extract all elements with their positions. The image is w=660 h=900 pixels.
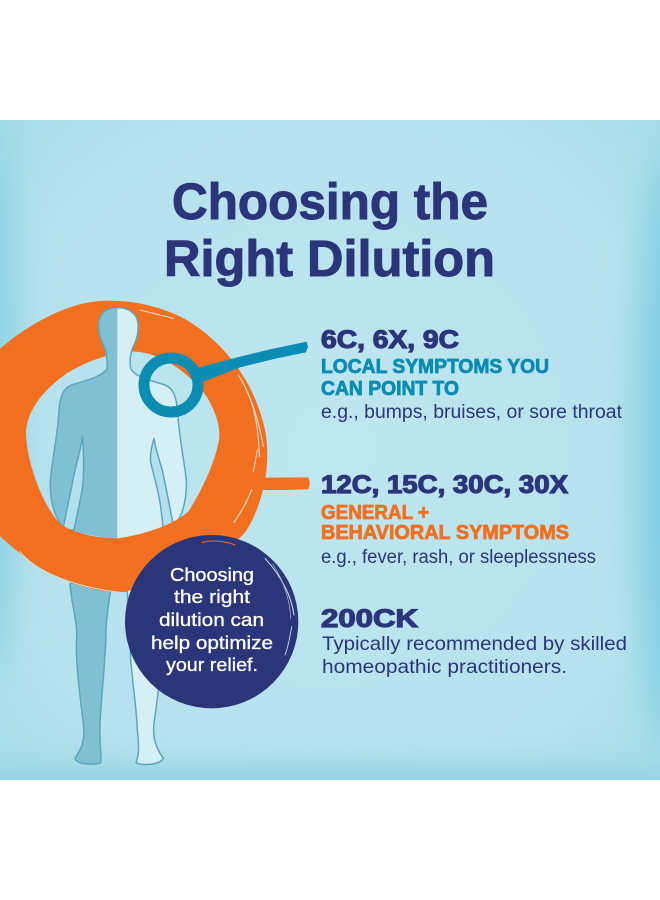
- section: 200CK: [321, 605, 627, 678]
- callout text: the right: [174, 587, 250, 607]
- orange pointer line: [260, 477, 310, 490]
- examples: e.g., bumps, bruises, or sore throat: [321, 402, 623, 423]
- body left half: [50, 308, 117, 540]
- callout text: Choosing: [170, 565, 254, 585]
- teal subheading: [321, 356, 549, 400]
- callout text: help optimize: [151, 633, 273, 653]
- examples: e.g., fever, rash, or sleeplessness: [321, 547, 596, 568]
- teal magnifier pointer: [144, 342, 308, 412]
- orange subheading: [321, 502, 569, 544]
- section: 12C, 15C, 30C, 30X: [321, 471, 596, 568]
- callout brush marks: [202, 541, 294, 655]
- title: Right Dilution: [164, 230, 495, 287]
- navy callout circle: [125, 535, 298, 708]
- title: [164, 173, 495, 287]
- dilution heading: 200CK: [321, 605, 418, 633]
- orange subheading: GENERAL +: [321, 502, 429, 524]
- human body figure: [50, 308, 186, 765]
- teal subheading: LOCAL SYMPTOMS YOU: [321, 356, 549, 378]
- illustration: body with target ring: [0, 301, 310, 765]
- title: Choosing the: [172, 173, 488, 230]
- teal handle: [195, 342, 308, 382]
- left leg: [70, 583, 112, 764]
- left arm gap: [63, 437, 84, 530]
- description: homeopathic practitioners.: [322, 657, 567, 678]
- callout text: your relief.: [166, 655, 258, 675]
- right leg: [127, 583, 167, 765]
- description: [322, 634, 627, 678]
- body outline: [50, 308, 186, 530]
- orange brush ring: [0, 301, 267, 592]
- callout text: [151, 565, 273, 675]
- orange subheading: BEHAVIORAL SYMPTOMS: [321, 522, 569, 544]
- brush highlights: [20, 310, 263, 593]
- dilution heading: 12C, 15C, 30C, 30X: [321, 471, 568, 499]
- description: Typically recommended by skilled: [322, 634, 627, 655]
- body right half: [117, 308, 186, 540]
- orange band over waist: [20, 512, 247, 592]
- teal lens ring: [144, 358, 198, 412]
- callout text: dilution can: [159, 610, 264, 630]
- right arm gap: [151, 438, 174, 530]
- section: 6C, 6X, 9C: [321, 326, 623, 423]
- teal subheading: CAN POINT TO: [321, 378, 459, 400]
- dilution heading: 6C, 6X, 9C: [321, 326, 459, 354]
- background panel: [0, 120, 660, 817]
